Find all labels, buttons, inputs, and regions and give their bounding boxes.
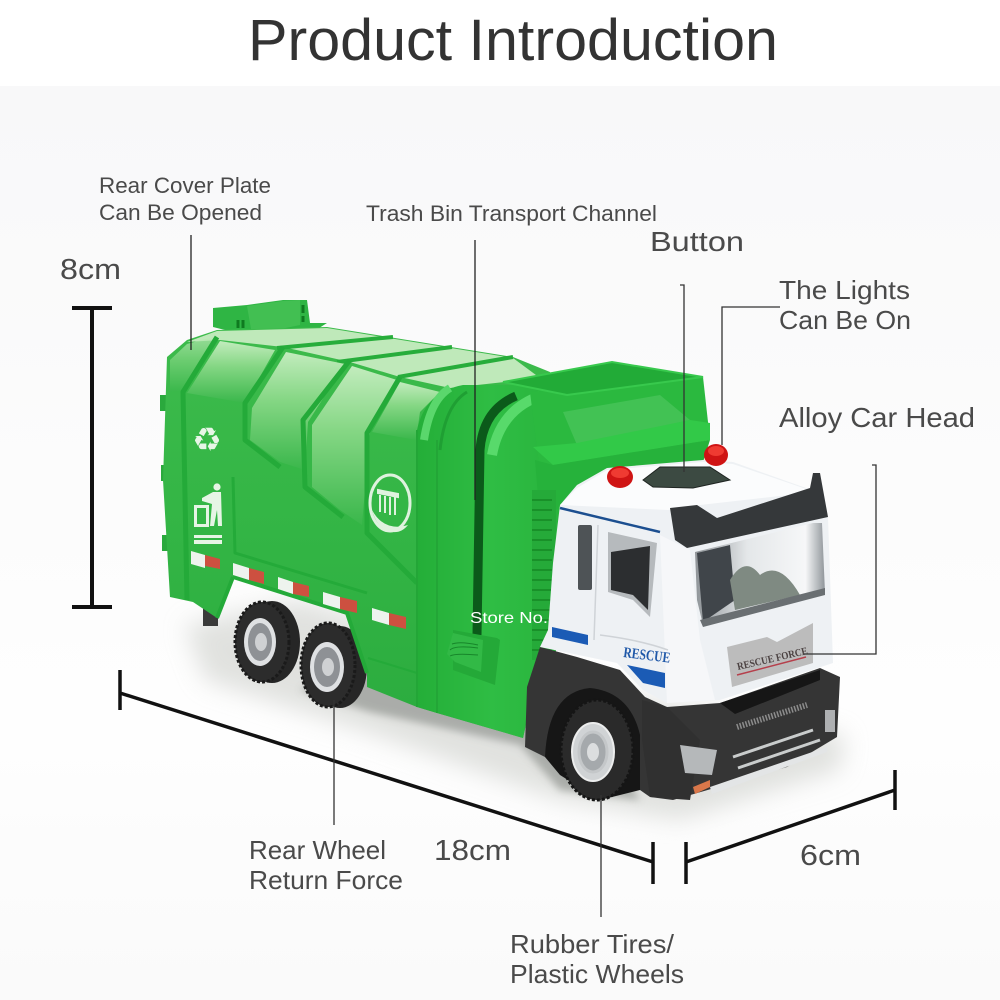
store watermark: Store No. [470, 610, 548, 627]
door window [608, 532, 657, 617]
height dimension 8cm [60, 254, 121, 607]
red light left [607, 466, 633, 488]
below ledge [535, 440, 710, 520]
reflective stripes [191, 551, 406, 629]
black visor [670, 473, 828, 548]
roof button [643, 467, 730, 488]
body ridges [183, 337, 417, 673]
small side window [578, 525, 592, 590]
callout: trash bin transport channel: Trash Bin Transport Channel [366, 201, 657, 226]
bin raised panel [563, 395, 690, 445]
height dimension 8cm: 8cm [60, 254, 121, 286]
roof surface [187, 328, 540, 388]
title: Product Introduction [248, 8, 778, 73]
side blue line [560, 508, 660, 532]
callout: rubber tires [510, 795, 684, 989]
recycling icon: ♻ [192, 420, 222, 459]
bin ledge [533, 420, 710, 465]
garbage truck illustration [160, 300, 840, 800]
length dimension 18cm: 18cm [434, 835, 511, 867]
roof ridges [277, 337, 513, 377]
bin backing [530, 377, 710, 472]
callout: rear wheel return force [249, 700, 403, 895]
windshield [695, 523, 825, 627]
cab front edge [660, 535, 715, 703]
transport channel groove [477, 396, 516, 635]
rear tabs [160, 395, 170, 551]
callout: rear cover plate: Rear Cover Plate [99, 173, 271, 198]
black cab lower panel [642, 700, 700, 800]
white cab [540, 460, 833, 703]
front grille and bumper details [680, 670, 835, 794]
nameplate [727, 623, 813, 687]
callout: rubber tires: Rubber Tires/ [510, 929, 675, 959]
length dimension 18cm [120, 670, 653, 884]
trash person icon [194, 483, 222, 544]
callout: alloy car head [779, 402, 975, 654]
ribbed side strip [532, 490, 556, 660]
round emblem [370, 475, 410, 532]
callout: rear cover plate: Can Be Opened [99, 200, 262, 225]
callout: button: Button [650, 226, 744, 257]
callout: rubber tires: Plastic Wheels [510, 959, 684, 989]
roof lid [213, 300, 327, 342]
black fender and bumper [525, 647, 840, 800]
blue side stripes [552, 627, 665, 688]
callout: rear wheel return force: Rear Wheel [249, 835, 386, 865]
width dimension 6cm [686, 770, 895, 884]
width dimension 6cm: 6cm [800, 840, 861, 872]
side latch handle [447, 630, 500, 685]
rescue lettering: RESCUE [623, 645, 671, 667]
door lines [594, 525, 668, 650]
panel highlights [417, 388, 540, 713]
callout: rear cover plate [99, 173, 271, 350]
bin interior [503, 362, 703, 395]
callout: rear wheel return force: Return Force [249, 865, 403, 895]
rear bumper stub [203, 604, 218, 626]
truck ground shadow [185, 600, 845, 820]
nameplate: RESCUE FORCE [736, 646, 809, 673]
rear wheels [235, 601, 367, 708]
front wheel [561, 700, 633, 800]
cab roof highlight [560, 462, 815, 510]
wheel arch [545, 688, 640, 800]
front section panel [417, 385, 567, 738]
callout: alloy car head: Alloy Car Head [779, 402, 975, 433]
container body [163, 327, 563, 738]
callout: lights: Can Be On [779, 305, 911, 335]
upper sloped panels [170, 335, 440, 525]
callout: lights [722, 275, 911, 445]
callout: lights: The Lights [779, 275, 910, 305]
callout: button [650, 226, 744, 472]
red light right [704, 444, 728, 466]
